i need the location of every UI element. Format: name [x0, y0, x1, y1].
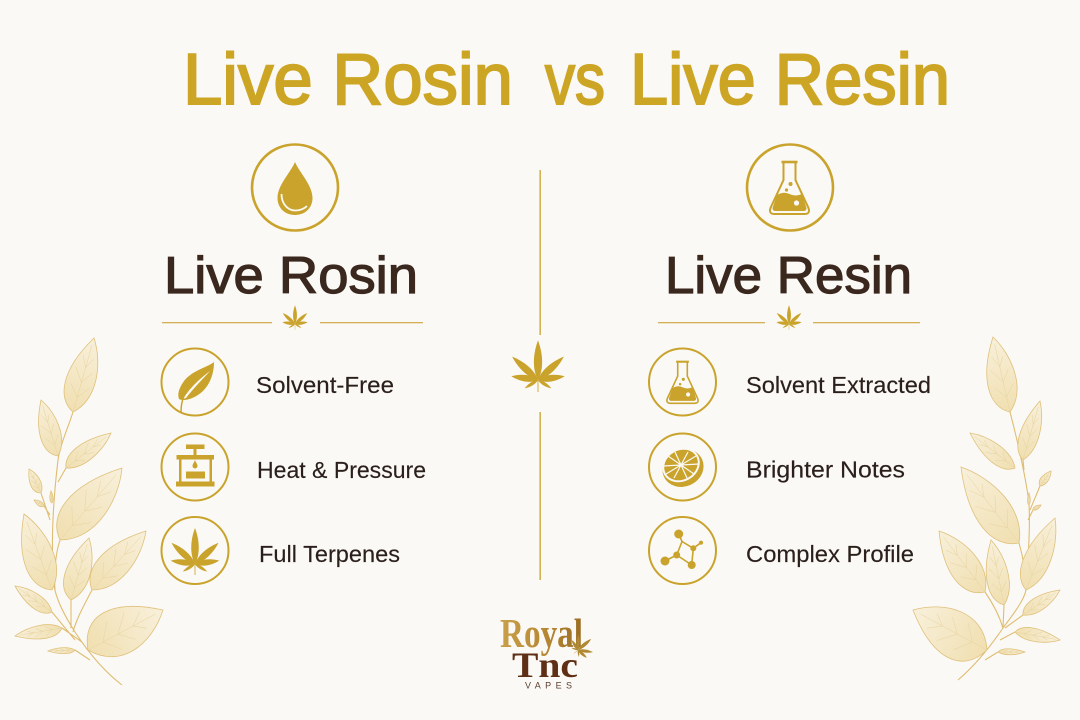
label: Solvent-Free [256, 372, 394, 398]
icon: small flask [649, 348, 716, 416]
logo: royal tnc vapes: VAPES [525, 680, 572, 690]
logo: royal tnc vapes [500, 610, 599, 690]
panel: live rosin [162, 144, 426, 584]
icon: molecule [649, 517, 716, 584]
botanical branch: right [901, 334, 1066, 680]
label: Brighter Notes [746, 456, 905, 482]
label: Solvent Extracted [746, 372, 931, 398]
feature: complex profile [649, 517, 914, 584]
divider with leaf [658, 305, 920, 330]
icon: leaf [162, 348, 228, 416]
icon: cannabis leaf [162, 517, 228, 584]
heading: live resin: Live Resin [665, 247, 912, 305]
feature: brighter notes [649, 434, 905, 500]
title: Live Rosin [183, 40, 513, 120]
logo: royal tnc vapes: Royal [500, 610, 583, 656]
center divider [510, 170, 566, 580]
icon: press [162, 434, 228, 500]
feature: solvent-free [162, 348, 394, 416]
label: Heat & Pressure [257, 457, 426, 483]
title [183, 40, 950, 120]
panel: live resin [649, 144, 931, 584]
feature: heat and pressure [162, 434, 426, 500]
title: vs [545, 40, 605, 120]
botanical branch: left [8, 334, 173, 685]
icon: center cannabis leaf [510, 340, 566, 392]
logo: royal tnc vapes: Tnc [512, 645, 578, 685]
icon: oil drop [252, 144, 338, 230]
feature: full terpenes [162, 517, 400, 584]
heading: live rosin: Live Rosin [164, 247, 418, 305]
title: Live Resin [630, 40, 950, 120]
label: Full Terpenes [259, 541, 400, 567]
label: Complex Profile [746, 541, 914, 567]
icon: flask [747, 144, 833, 230]
feature: solvent extracted [649, 348, 931, 416]
icon: citrus [649, 434, 716, 500]
divider with leaf [162, 305, 423, 330]
